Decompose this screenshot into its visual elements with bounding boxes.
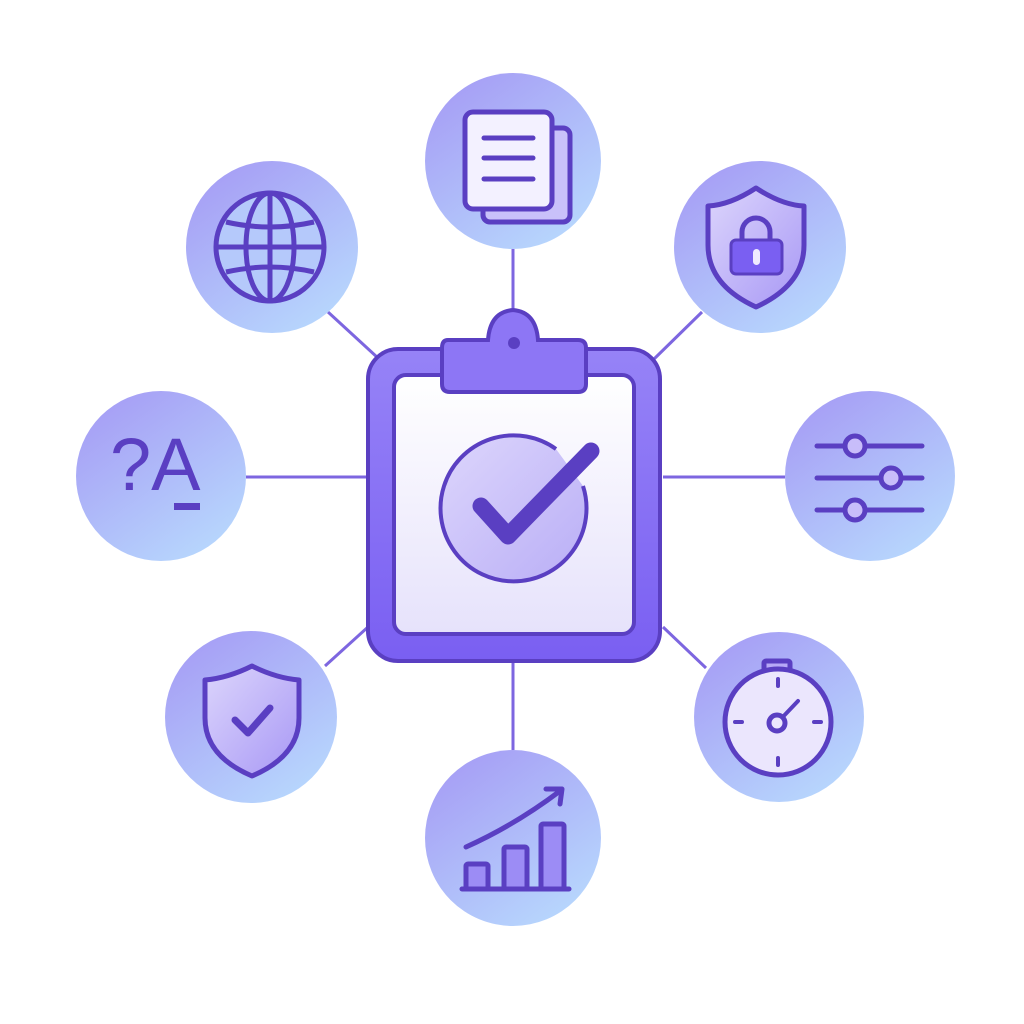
node: shield lock	[674, 161, 846, 333]
node: documents	[425, 73, 601, 249]
node: spelling	[76, 391, 246, 561]
node: sliders	[785, 391, 955, 561]
central clipboard	[368, 310, 660, 661]
node: shield check	[165, 631, 337, 803]
check circle	[441, 435, 591, 581]
node: stopwatch	[694, 632, 864, 802]
node: globe	[186, 161, 358, 333]
node: spelling: ?A	[110, 423, 201, 506]
node: growth chart	[425, 750, 601, 926]
connector lines	[246, 249, 785, 750]
